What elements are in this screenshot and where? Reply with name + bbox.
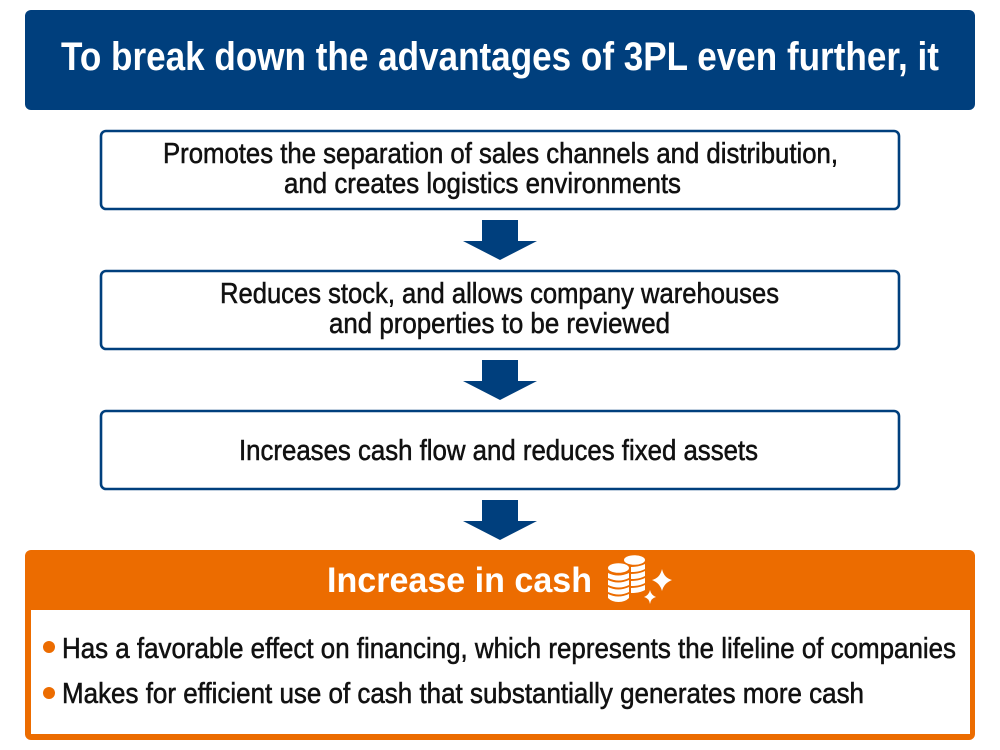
arrow 1	[463, 220, 537, 260]
step box: cash flow: Increases cash flow and reduces fixed assets	[239, 435, 758, 467]
step box: separation of sales channels: Promotes the separation of sales channels and distribution,	[163, 138, 838, 170]
bullet 2: Makes for efficient use of cash that substantially generates more cash	[62, 678, 864, 710]
step box: separation of sales channels: and creates logistics environments	[284, 168, 681, 200]
step box: reduces stock	[101, 271, 899, 349]
step box: separation of sales channels	[101, 131, 899, 209]
panel: increase in cash	[25, 550, 975, 740]
title banner	[25, 10, 975, 110]
arrow 2	[463, 360, 537, 400]
arrow 3	[463, 500, 537, 540]
step box: reduces stock: and properties to be reviewed	[329, 308, 670, 340]
step box: reduces stock: Reduces stock, and allows company warehouses	[220, 278, 779, 310]
icon: coin stacks and sparkles	[608, 555, 672, 604]
panel heading: Increase in cash	[327, 561, 592, 600]
step box: cash flow	[101, 411, 899, 489]
